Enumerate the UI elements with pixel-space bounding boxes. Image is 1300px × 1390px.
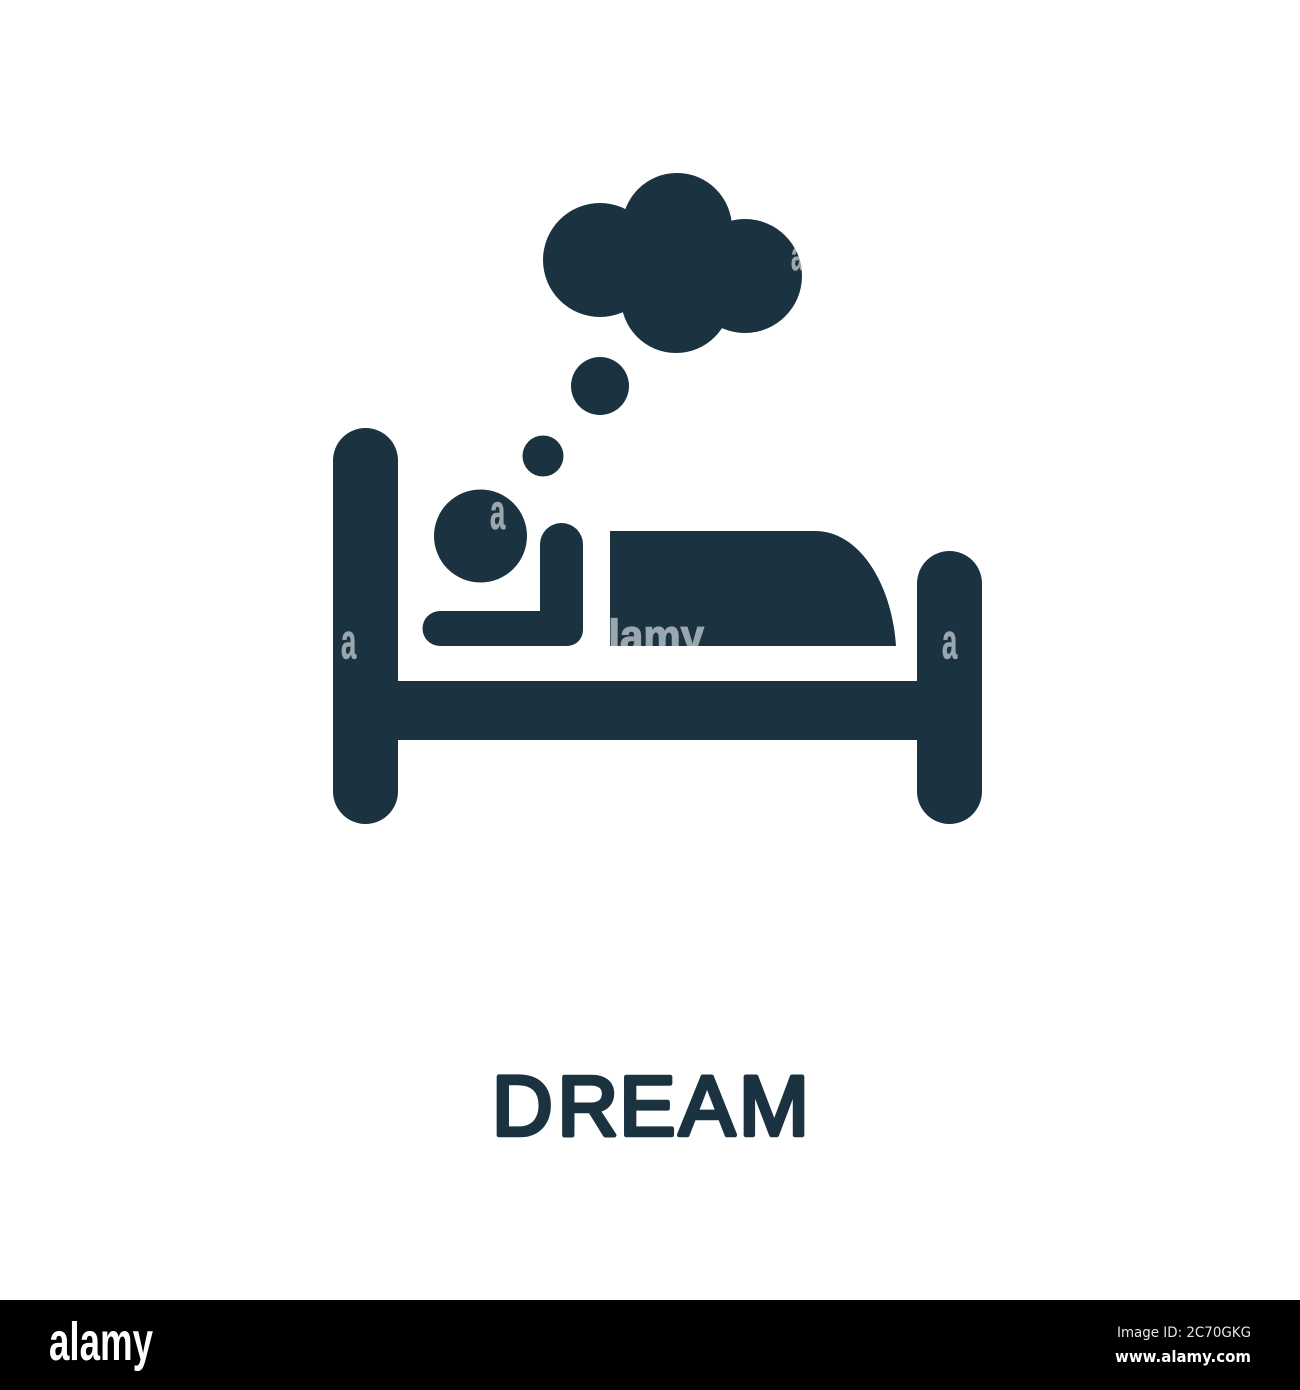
- icon: blanket: [610, 531, 896, 646]
- footer logo: alamy: [49, 1312, 153, 1372]
- watermark fragments on icon: alamy: [585, 611, 704, 662]
- icon: small thought bubble: [522, 436, 564, 476]
- watermark fragments on icon: [341, 233, 958, 670]
- watermark fragments on icon: a: [791, 233, 805, 280]
- icon: sleeper head: [434, 490, 527, 582]
- watermark fragments on icon: a: [942, 613, 958, 670]
- title: DREAM: [492, 1059, 809, 1153]
- icon: bed: [333, 428, 982, 824]
- icon: large thought bubble: [571, 357, 629, 415]
- website: www.alamy.com: [1115, 1347, 1251, 1366]
- watermark fragments on icon: a: [341, 613, 357, 670]
- footer bar: [0, 1300, 1300, 1390]
- icon: thought cloud: [543, 173, 802, 353]
- icon: sleeper arm: [422, 523, 583, 646]
- watermark fragments on icon: a: [490, 483, 506, 540]
- image id: Image ID: 2C70GKG: [1117, 1325, 1251, 1341]
